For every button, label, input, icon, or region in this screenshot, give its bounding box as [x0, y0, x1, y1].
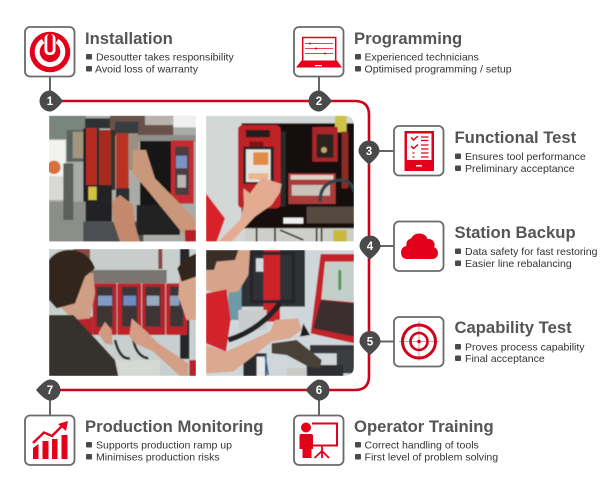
checklist: programming: Optimised programming / setup: [364, 64, 512, 76]
checklist: installation: [86, 52, 234, 76]
photo: touchscreen controller: [206, 116, 354, 242]
step 5: capability test: [360, 317, 585, 366]
heading: functional test: Functional Test: [454, 128, 577, 147]
pin 7: 7: [47, 385, 53, 397]
checklist: operator training: [355, 440, 498, 464]
connector 7: [49, 390, 51, 415]
connector 3: [369, 150, 394, 152]
icon box: cloud: [394, 222, 444, 271]
pin 1: 1: [47, 96, 54, 108]
pin 7: [36, 380, 60, 400]
heading: production monitoring: Production Monitoring: [85, 417, 263, 436]
checklist: installation: Avoid loss of warranty: [95, 64, 199, 76]
photo: two men at controllers: [49, 249, 196, 376]
heading: installation: Installation: [85, 29, 173, 48]
checklist: functional test: Preliminary acceptance: [465, 163, 575, 175]
step 3: functional test: [358, 126, 586, 176]
heading: capability test: Capability Test: [454, 318, 572, 337]
checklist: functional test: Ensures tool performance: [465, 151, 586, 163]
checklist: station backup: Easier line rebalancing: [465, 258, 572, 270]
pin 6: [306, 380, 330, 400]
photo: operator with Delta Cart: [206, 250, 354, 376]
checklist: station backup: [455, 246, 598, 270]
checklist: installation: Desoutter takes responsibility: [96, 52, 234, 64]
pin 6: 6: [316, 385, 322, 397]
heading: operator training: Operator Training: [354, 417, 494, 436]
checklist: programming: Experienced technicians: [364, 52, 479, 64]
connector 6: [318, 390, 320, 415]
pin 4: 4: [367, 241, 374, 253]
checklist: operator training: Correct handling of tools: [364, 440, 479, 452]
step 4: station backup: [360, 222, 598, 271]
pin 5: [360, 331, 380, 355]
connector 1: [49, 76, 51, 101]
connector 2: [318, 76, 320, 101]
checklist: station backup: Data safety for fast restoring: [465, 246, 598, 258]
checklist: capability test: Proves process capability: [465, 342, 585, 354]
step 1: installation: [25, 27, 234, 112]
pin 3: [358, 140, 380, 164]
checklist: functional test: [455, 151, 586, 175]
checklist: programming: [355, 52, 512, 76]
photo: technician installing tools: [47, 116, 196, 242]
checklist: production monitoring: [86, 440, 232, 464]
icon box: laptop: [294, 27, 344, 76]
checklist: capability test: Final acceptance: [465, 353, 545, 365]
step 6: operator training: [294, 380, 498, 465]
icon box: trainer: [294, 416, 344, 465]
checklist: operator training: First level of problem solving: [364, 452, 498, 464]
step 2: programming: [294, 27, 512, 112]
connector 5: [370, 340, 394, 342]
checklist: production monitoring: Supports production ramp up: [96, 440, 232, 452]
pin 2: 2: [316, 96, 322, 108]
pin 5: 5: [367, 337, 374, 349]
checklist: capability test: [455, 342, 585, 365]
icon box: target: [394, 317, 444, 366]
checklist: production monitoring: Minimises production risks: [96, 452, 220, 464]
icon box: checklist tablet: [394, 126, 444, 176]
heading: programming: Programming: [354, 29, 462, 48]
pin 2: [308, 90, 332, 112]
heading: station backup: Station Backup: [454, 223, 576, 242]
pin 4: [360, 236, 380, 260]
connector 4: [370, 245, 394, 247]
step 7: production monitoring: [25, 380, 263, 465]
icon box: power: [25, 27, 74, 76]
pin 1: [40, 90, 63, 112]
process rail: [50, 101, 369, 390]
pin 3: 3: [366, 146, 372, 158]
icon box: growth chart: [25, 416, 74, 465]
